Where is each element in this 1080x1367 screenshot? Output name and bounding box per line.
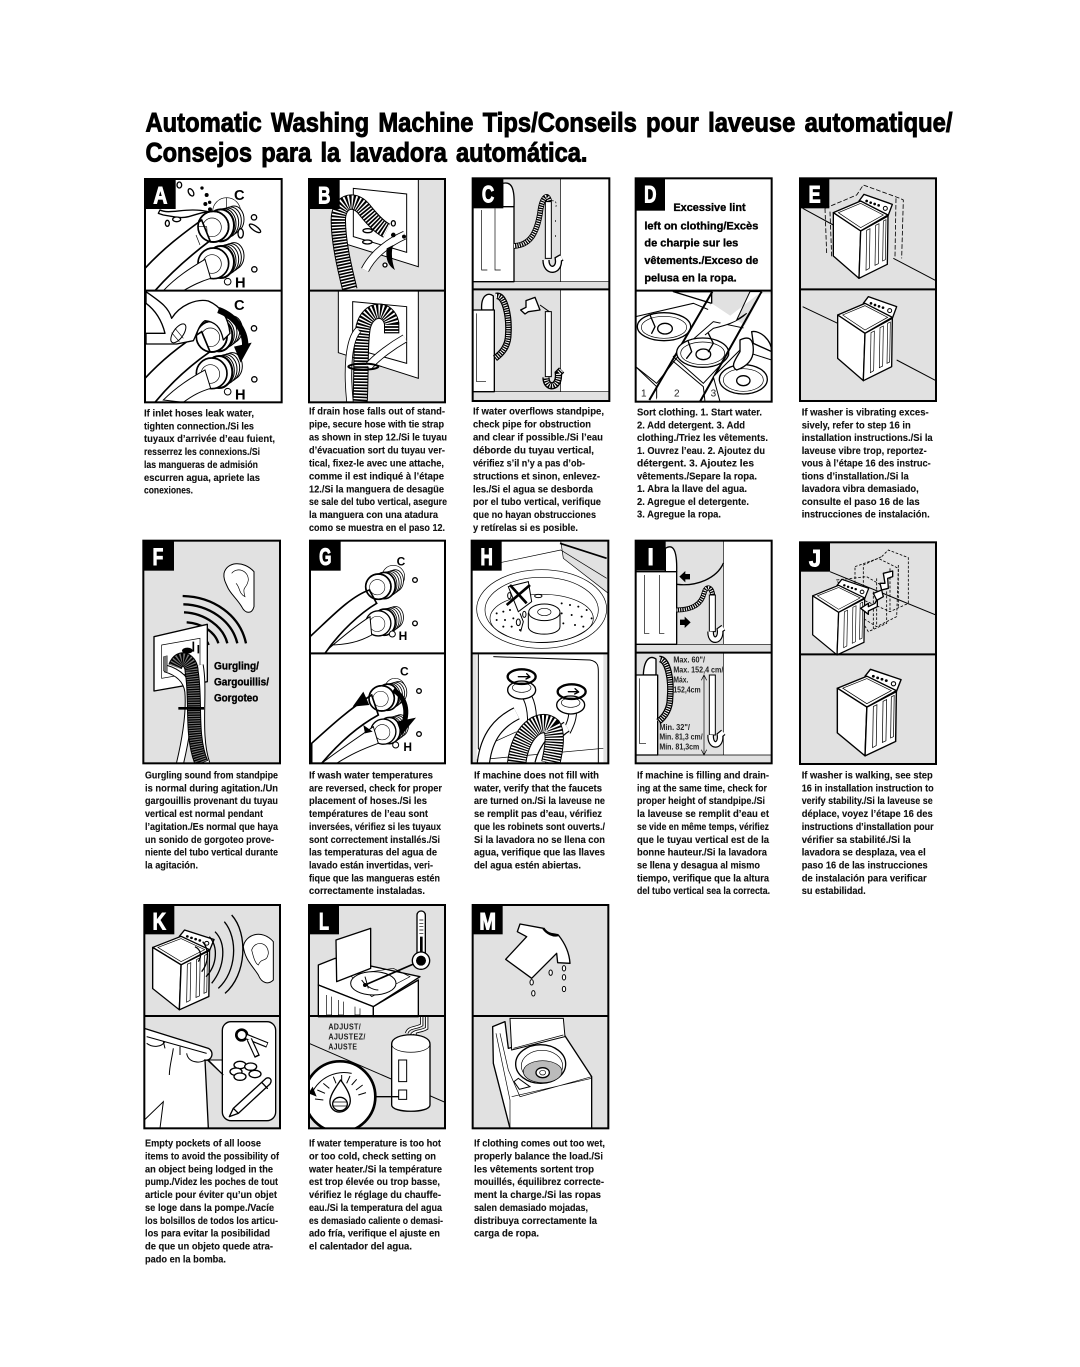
letter badge E: E [809,182,821,209]
icon: tightening with pliers: H [235,387,246,403]
caption F: un sonido de gorgoteo prove- [145,835,274,846]
icon: wet t-shirt with drops [506,924,570,996]
icon: reversed hoses with arrows: C [400,665,409,679]
caption I: bonne hauteur./Si la lavadora [637,848,767,859]
icon: washer with unbalanced load [493,1018,592,1128]
icon: vibrating washer [803,185,936,281]
icon: standpipe height limits [636,653,772,763]
caption L: eau./Si la temperatura del agua [309,1203,442,1214]
caption C: déborde du tuyau vertical, [473,445,594,456]
caption H: del agua estén abiertas. [474,860,581,872]
letter badge B [309,179,340,209]
caption G: If wash water temperatures [309,770,433,782]
icon: drain hose out of standpipe [338,179,418,290]
letter badge L [309,905,339,935]
caption F: vertical est normal pendant [145,809,263,820]
caption A: conexiones. [144,486,193,497]
caption C [473,406,604,534]
heading: excessive lint: vêtements./Exceso de [644,255,758,267]
caption D: 2. Agregue el detergente. [637,497,749,508]
icon: leaking hose connection [145,182,262,291]
label: adjust [328,1022,366,1051]
letter badge M [473,905,503,935]
letter badge G [310,541,341,571]
caption K: article pour éviter qu’un objet [145,1190,278,1201]
caption E: laveuse vibre trop, reportez- [802,446,927,457]
label: gurgling: Gurgling/ [214,660,260,672]
caption G: lavado están invertidas, veri- [309,860,433,872]
caption L: or too cold, check setting on [309,1151,436,1162]
panel: E [800,178,936,401]
caption G: fique que las mangueras estén [309,873,440,884]
step number 1: 1 [641,389,647,400]
caption H: If machine does not fill with [474,770,599,782]
caption B: If drain hose falls out of stand- [309,406,446,418]
caption I: ing at the same time, check for [637,783,767,794]
caption L: el calentador del agua. [309,1242,412,1253]
caption D [637,408,768,520]
caption E: consulte el paso 16 de las [802,497,920,508]
caption E [802,408,933,520]
caption C: les./Si el agua se desborda [473,484,593,495]
icon: walking washer with arrows [813,550,936,655]
caption F: niente del tubo vertical durante [145,848,278,859]
caption M: distribuya correctamente la [474,1216,597,1227]
caption M: ment la charge./Si las ropas [474,1190,601,1201]
label: min height: Min. 32"/ [659,723,691,732]
caption C: y retírelas si es posible. [473,523,578,534]
caption F: la agitación. [145,860,198,872]
caption L: est trop élevée ou trop basse, [309,1177,440,1188]
illustration: three washing steps [636,291,772,402]
label: min height: Mín. 81,3cm [659,742,699,751]
caption F: gargouillis provenant du tuyau [145,796,278,807]
caption C: que no hayan obstrucciones [473,510,596,521]
caption M: mouillés, équilibrez correcte- [474,1177,605,1188]
caption D: détergent. 3. Ajoutez les [637,458,754,470]
caption I [637,770,770,897]
caption H: are turned on./Si la laveuse ne [474,796,605,807]
caption H: se remplit pas d’eau, vérifiez [474,809,602,820]
caption L: ado fría, verifique el ajuste en [309,1229,440,1240]
panel: A [145,179,282,403]
caption A: escurren agua, apriete las [144,473,260,484]
caption C: vérifiez s’il n’y a pas d’ob- [473,458,585,469]
caption J: lavadora se desplaza, vea el [802,848,926,859]
caption M: properly balance the load./Si [474,1151,603,1162]
title: Automatic Washing Machine Tips/Conseils pour laveuse automatique/ [146,108,953,138]
caption E: instrucciones de instalación. [802,510,930,520]
heading: excessive lint: de charpie sur les [644,238,738,250]
icon: pen [229,1078,271,1117]
letter badge F [143,541,174,571]
caption G: inversées, vérifiez si les tuyaux [309,822,441,833]
label: max height: 152,4cm [673,685,701,694]
letter badge C [473,178,503,209]
panel: D [636,178,772,402]
caption K: pump./Videz les poches de tout [145,1177,278,1188]
caption L: vérifiez le réglage du chauffe- [309,1190,442,1201]
caption B: como se muestra en el paso 12. [309,523,445,534]
caption I: se vide en même temps, vérifiez [637,822,769,833]
icon: hoses at faucets: C [397,555,406,569]
caption K: pado en la bomba. [145,1254,226,1266]
label: max height: Máx. [673,676,688,685]
caption J: If washer is walking, see step [802,770,933,782]
caption B: la manguera con una atadura [309,510,438,521]
letter badge D [636,178,665,211]
caption G: placement of hoses./Si les [309,796,427,807]
caption F: Gurgling sound from standpipe [145,770,278,782]
caption C: If water overflows standpipe, [473,406,604,418]
caption G: sont correctement installés./Si [309,835,440,846]
icon: reversed hoses with arrows [312,665,421,763]
caption G: are reversed, check for proper [309,783,442,794]
letter badge H [472,541,502,571]
caption G: las temperaturas del agua de [309,848,437,859]
callout: pocket contents [207,1022,276,1121]
icon: overflowing standpipe [473,178,609,289]
label: max height: Max. 152,4 cm/ [673,666,724,675]
caption J: instructions d’installation pour [802,822,934,833]
letter badge I [636,541,666,571]
caption G [309,770,442,897]
caption H: que les robinets sont ouverts./ [474,822,605,833]
icon: washer tub with blocked flow [472,541,608,653]
panel: G [310,541,445,763]
caption A: resserrez les connexions./Si [144,447,260,458]
label: adjust: ADJUST/ [328,1022,361,1031]
caption E: tions d’installation./Si la [802,471,909,482]
letter badge E [800,178,829,209]
letter badge K [144,905,174,935]
title [146,108,953,168]
caption G: correctamente instaladas. [309,886,425,897]
panel: L [305,905,445,1132]
title: Consejos para la lavadora automática. [146,138,588,168]
caption A [144,408,275,497]
heading: excessive lint: Excessive lint [673,202,746,214]
caption J: déplace, voyez l’étape 16 des [802,809,933,820]
icon: washer with thermometer [318,911,430,1017]
icon: hose and standpipe with arrows [636,541,772,653]
panel: H [472,541,608,763]
caption B: se sale del tubo vertical, asegure [309,497,447,508]
caption L: If water temperature is too hot [309,1138,441,1150]
caption D: Sort clothing. 1. Start water. [637,408,762,418]
caption I: se llena y desagua al mismo [637,860,760,872]
label: min height: Min. 81,3 cm/ [659,732,703,741]
caption B: comme il est indiqué à l’étape [309,471,444,482]
caption D: 3. Agregue la ropa. [637,510,721,520]
icon: wall outlet with hoses [154,624,207,763]
caption H: agua, verifique que las llaves [474,848,605,859]
heading: excessive lint [644,202,758,285]
panel: I [636,541,772,763]
panel: J [800,542,936,764]
icon: leaking hose connection: H [235,275,246,291]
icon: hoses at faucets: H [399,629,407,643]
label: gurgling: Gargouillis/ [214,677,270,689]
caption K: de que un objeto quede atra- [145,1242,274,1253]
caption M: salen demasiado mojadas, [474,1203,588,1214]
caption H: Si la lavadora no se llena con [474,835,605,846]
letter badge I: I [648,544,654,571]
letter badge J: J [809,545,821,572]
label: adjust: AJUSTE [328,1042,358,1051]
caption A: tighten connection./Si les [144,421,254,432]
caption I: If machine is filling and drain- [637,770,770,782]
caption E: sively, refer to step 16 in [802,420,911,431]
caption K: los para evitar la posibilidad [145,1229,270,1240]
caption M: les vêtements sortent trop [474,1164,594,1175]
caption M: If clothing comes out too wet, [474,1138,605,1150]
caption K: items to avoid the possibility of [145,1151,279,1162]
step number 2: 2 [674,389,680,400]
caption I: que le tuyau vertical est de la [637,835,769,846]
letter badge A [145,179,176,209]
caption J: 16 in installation instruction to [802,783,934,794]
icon: cleared standpipe [473,289,609,401]
caption C: check pipe for obstruction [473,420,591,430]
caption C: and clear if possible./Si l’eau [473,432,603,443]
letter badge L: L [319,908,329,935]
letter badge A: A [153,182,167,209]
icon: reversed hoses with arrows: H [403,740,412,754]
caption F [145,770,278,872]
label: gurgling: Gorgoteo [214,693,258,705]
caption E: installation instructions./Si la [802,433,933,444]
icon: leaking hose connection: C [234,188,245,204]
label: min height [659,723,703,751]
caption I: tiempo, verifique que la altura [637,873,769,884]
caption I: proper height of standpipe./Si [637,796,765,807]
caption E: vous à l’étape 16 des instruc- [802,458,931,470]
caption B: as shown in step 12./Si le tuyau [309,432,447,443]
caption C: por el tubo vertical, verifique [473,497,601,508]
caption K: se loge dans la pompe./Vacíe [145,1203,274,1214]
caption D: 2. Add detergent. 3. Add [637,420,745,431]
letter badge F: F [153,544,163,571]
heading: excessive lint: pelusa en la ropa. [644,273,737,285]
caption K: Empty pockets of all loose [145,1138,261,1150]
icon: hose secured with tie strap [338,291,418,402]
caption M [474,1138,605,1240]
letter badge K: K [153,908,167,935]
caption B: tical, fixez-le avec une attache, [309,458,444,469]
caption B: d’évacuation sort du tuyau ver- [309,445,445,456]
letter badge M: M [479,908,496,935]
label: adjust: AJUSTEZ/ [328,1032,366,1041]
caption L [308,1138,443,1253]
caption K: an object being lodged in the [145,1164,273,1175]
caption D: clothing./Triez les vêtements. [637,433,768,444]
caption F: is normal during agitation./Un [145,783,278,794]
panel: M [473,905,608,1128]
caption A: If inlet hoses leak water, [144,408,254,420]
caption D: 1. Abra la llave del agua. [637,484,747,495]
icon: faucets turned on [477,654,603,763]
panel: F [143,541,280,763]
panel: B [309,179,445,402]
icon: level washer [803,297,936,381]
caption H [473,770,605,872]
icon: hoses at faucets [310,555,417,653]
caption J: paso 16 de las instrucciones [802,860,928,872]
caption B [309,406,447,534]
caption D: 1. Ouvrez l’eau. 2. Ajoutez du [637,446,765,457]
caption I: del tubo vertical sea la correcta. [637,886,770,897]
caption B: pipe, secure hose with tie strap [309,420,444,430]
caption B: 12./Si la manguera de desagüe [309,484,444,495]
icon: tightening with pliers [145,292,257,403]
icon: sound waves [183,596,246,650]
letter badge B: B [318,182,330,209]
icon: noisy washer and ear [153,915,273,1010]
caption J [802,770,934,897]
caption K: los bolsillos de todos los articu- [145,1216,278,1227]
caption J: vérifier sa stabilité./Si la [802,835,911,846]
caption M: carga de ropa. [474,1229,539,1240]
icon: jeans pocket [144,1028,212,1128]
panel: C [473,178,609,401]
label: max height: Max. 60"/ [673,656,706,665]
caption A: las mangueras de admisión [144,460,258,471]
icon: stable washer [837,669,901,756]
icon: water heater and dial [305,1017,445,1132]
caption L: water heater./Si la température [308,1164,442,1175]
caption K [145,1138,279,1266]
letter badge H: H [480,544,493,571]
caption F: l’agitation./Es normal que haya [145,822,278,833]
letter badge C: C [482,182,494,209]
infographic page [142,112,953,1264]
icon: keys [236,1030,267,1057]
icon: tightening with pliers: C [234,298,245,314]
caption L: es demasiado caliente o demasi- [309,1216,443,1227]
letter badge G: G [319,544,331,571]
caption G: températures de l’eau sont [309,809,429,820]
panel: K [144,905,280,1128]
caption J: de instalación para verificar [802,873,927,884]
caption J: su estabilidad. [802,886,866,897]
caption A: tuyaux d’arrivée d’eau fuient, [144,434,275,445]
icon: ear [224,564,254,612]
heading: excessive lint: left on clothing/Excès [644,220,758,232]
caption H: water, verify that the faucets [473,783,602,794]
label: max height [673,656,724,694]
letter badge D: D [644,182,656,209]
caption C: structions et sinon, enlevez- [473,471,601,482]
icon: coins [230,1061,261,1080]
caption J: verify stability./Si la laveuse se [802,796,933,807]
label: gurgling [214,660,270,705]
caption E: If washer is vibrating exces- [802,408,929,418]
caption E: lavadora vibra demasiado, [802,484,919,495]
step number 3: 3 [711,389,717,400]
caption D: vêtements./Separe la ropa. [637,471,757,482]
caption I: la laveuse se remplit d’eau et [637,809,770,820]
letter badge J [800,542,830,572]
